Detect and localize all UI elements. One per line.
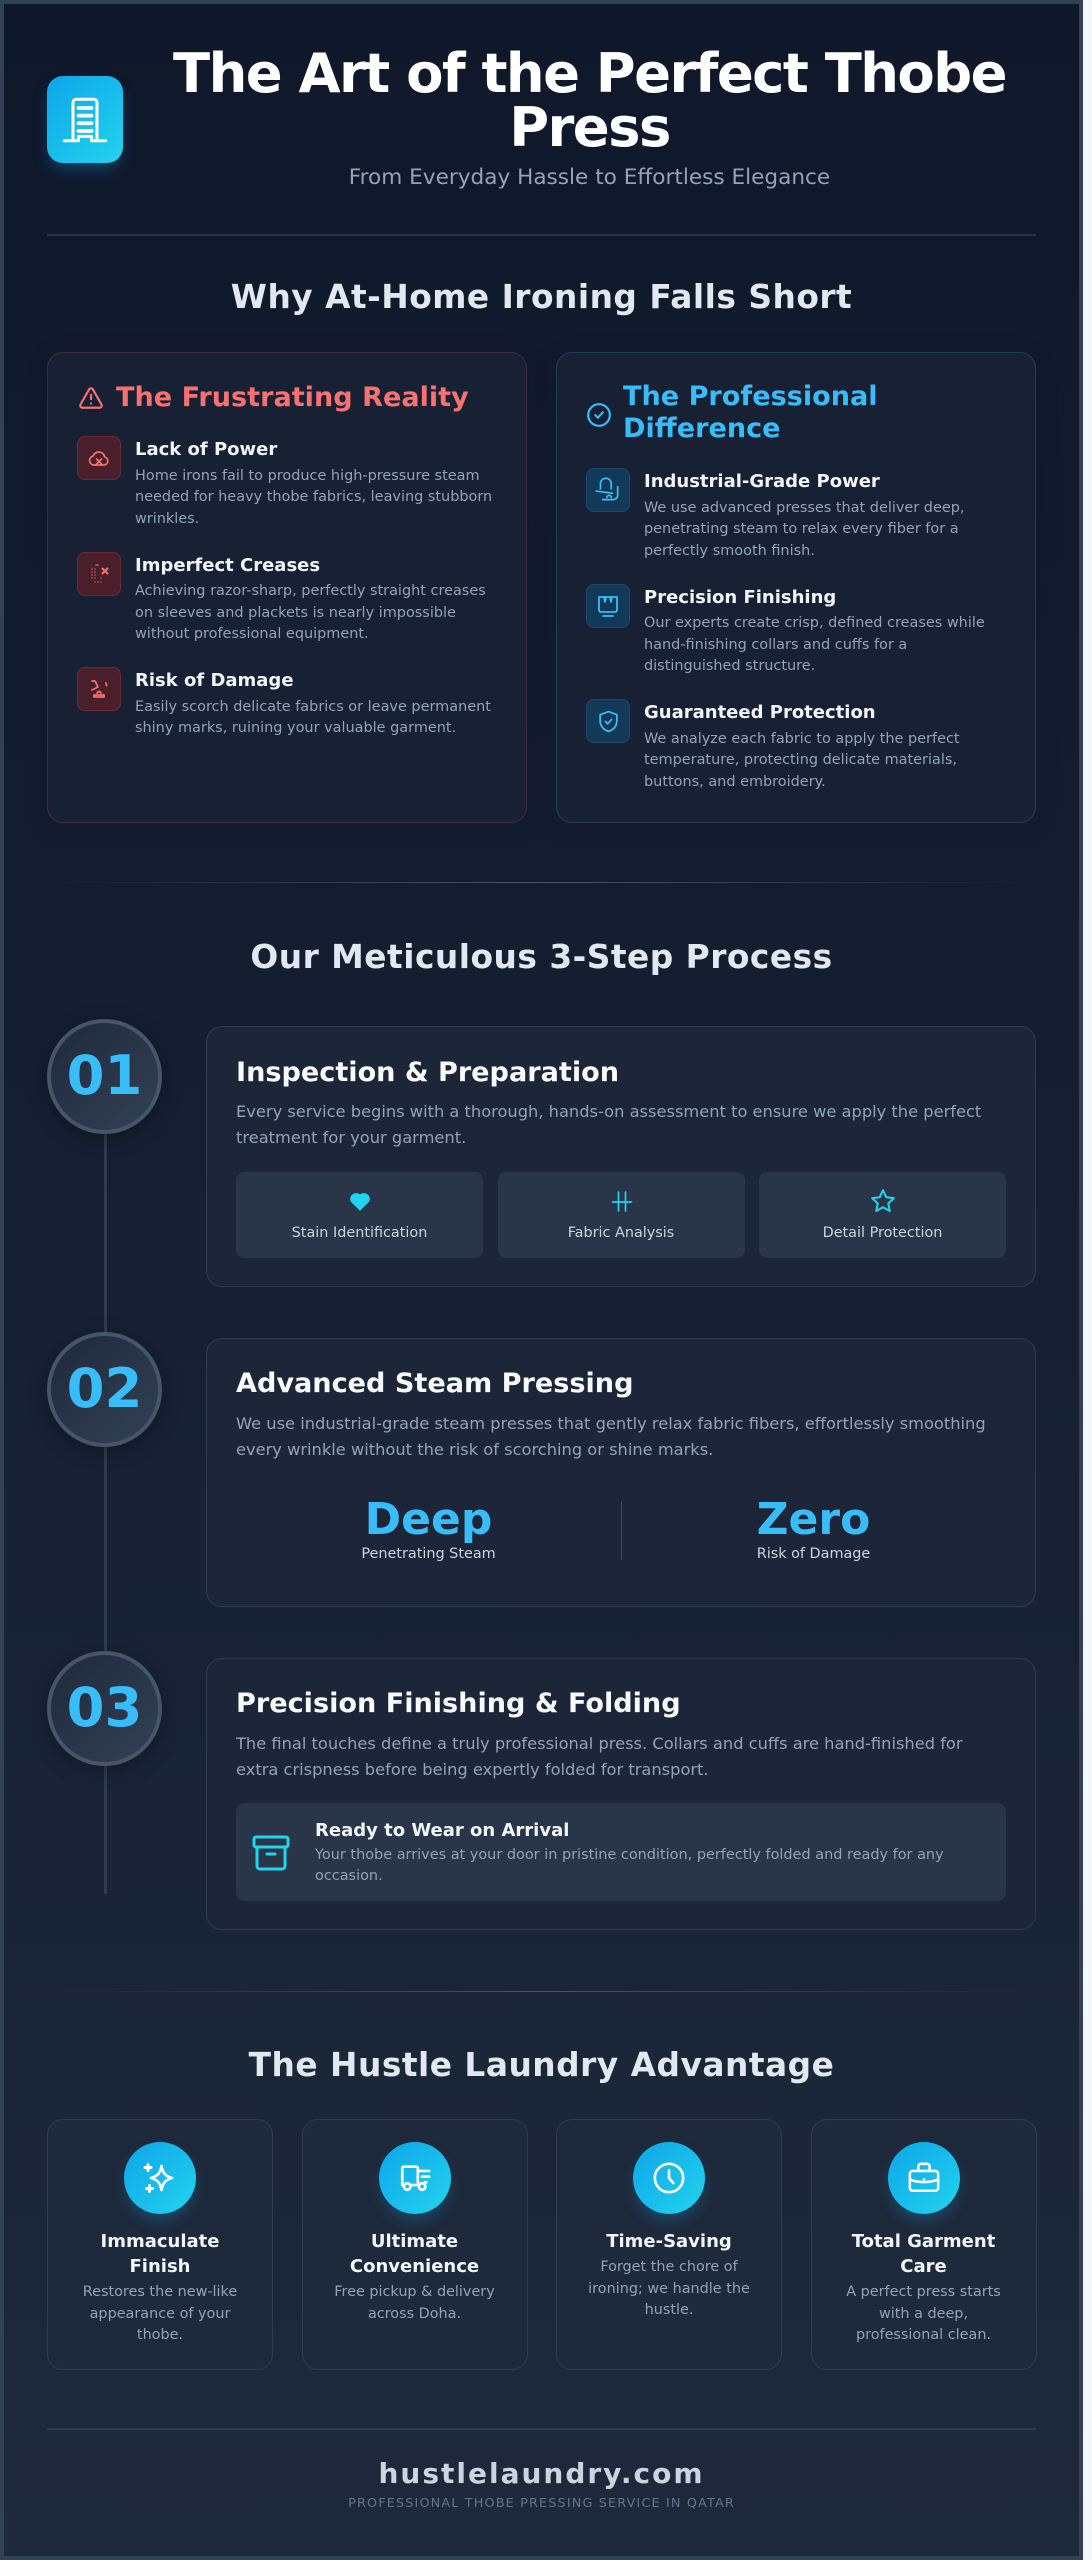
item: guaranteed protection: temperature, protecting delicate materials,: [644, 752, 957, 768]
item: lack of power: Lack of Power: [135, 439, 277, 460]
icon: cloud off: [77, 436, 121, 480]
feature: stain identification: [236, 1172, 483, 1258]
stat: deep: Penetrating Steam: [361, 1546, 496, 1562]
item: guaranteed protection: We analyze each fabric to apply the perfect: [644, 730, 960, 746]
card: ultimate convenience: Ultimate: [371, 2231, 458, 2252]
card: total garment care: Total Garment: [852, 2231, 995, 2252]
heading: why at-home ironing falls short: Why At-Home Ironing Falls Short: [231, 278, 852, 316]
icon: warning triangle: [79, 387, 103, 409]
item: risk of damage: Easily scorch delicate fabrics or leave permanent: [135, 698, 491, 714]
item: precision finishing: Our experts create crisp, defined creases while: [644, 615, 985, 631]
item: lack of power: [77, 436, 492, 527]
icon: star: [871, 1189, 895, 1212]
panel: the professional difference: [556, 352, 1036, 823]
step 02 text: every wrinkle without the risk of scorching or shine marks.: [236, 1440, 713, 1459]
panel heading: the professional difference: The Professional: [623, 381, 878, 412]
card: total garment care: Care: [900, 2256, 947, 2277]
step 03 text: The final touches define a truly professional press. Collars and cuffs are hand-finished for: [236, 1734, 963, 1753]
step 01 number: 01: [67, 1044, 142, 1107]
icon: dotted crease with x: [77, 552, 121, 596]
icon: shield check: [586, 699, 630, 743]
heading: the hustle laundry advantage: The Hustle Laundry Advantage: [249, 2046, 834, 2084]
panel heading: the professional difference: Difference: [623, 413, 781, 444]
step 03 card: [206, 1658, 1036, 1930]
card: immaculate finish: appearance of your: [90, 2306, 230, 2322]
step 01 text: [236, 1102, 981, 1147]
callout: ready to wear on arrival: Your thobe arrives at your door in pristine condition, perfectly folded and ready for any: [315, 1846, 944, 1862]
step 02 number: 02: [67, 1357, 142, 1420]
title: Press: [509, 96, 670, 159]
icon: collar tray: [586, 584, 630, 628]
stat: zero: Risk of Damage: [757, 1546, 870, 1562]
item: precision finishing: hand-finishing collars and cuffs for a: [644, 637, 907, 653]
item: imperfect creases: Achieving razor-sharp, perfectly straight creases: [135, 583, 486, 599]
card: immaculate finish: Immaculate: [101, 2231, 219, 2252]
callout: ready to wear on arrival: occasion.: [315, 1868, 383, 1884]
feature: detail protection: [759, 1172, 1006, 1258]
step 02 card: [206, 1338, 1036, 1607]
item: imperfect creases: without professional equipment.: [135, 626, 369, 642]
panel heading: the frustrating reality: The Frustrating Reality: [116, 382, 469, 413]
card: immaculate finish: [47, 2119, 273, 2370]
footer url: hustlelaundry.com: [378, 2457, 705, 2490]
step 02 number: [47, 1332, 162, 1447]
item: lack of power: wrinkles.: [135, 511, 199, 527]
timeline line: [104, 1130, 107, 1894]
callout: ready to wear on arrival: Ready to Wear on Arrival: [315, 1820, 569, 1841]
item: imperfect creases: Imperfect Creases: [135, 554, 320, 576]
icon: briefcase: [888, 2142, 960, 2214]
icon: archive box: [252, 1836, 290, 1870]
step 01 title: Inspection & Preparation: [236, 1056, 619, 1088]
card: total garment care: [810, 2119, 1036, 2370]
card: total garment care: A perfect press starts: [846, 2284, 1001, 2300]
feature: detail protection: Detail Protection: [823, 1225, 942, 1241]
card: time-saving: hustle.: [645, 2302, 693, 2318]
panel: the frustrating reality: [47, 352, 527, 823]
card: immaculate finish: Finish: [130, 2256, 190, 2277]
card: time-saving: [556, 2119, 782, 2370]
step 02 text: [236, 1414, 986, 1459]
icon: sparkles: [124, 2142, 196, 2214]
item: risk of damage: Risk of Damage: [135, 670, 294, 691]
icon: hash lines: [612, 1191, 632, 1212]
item: industrial-grade power: We use advanced presses that deliver deep,: [644, 500, 964, 516]
feature: fabric analysis: Fabric Analysis: [568, 1225, 674, 1241]
icon: clock: [633, 2142, 705, 2214]
step 03 text: extra crispness before being expertly folded for transport.: [236, 1760, 709, 1779]
item: risk of damage: [77, 667, 491, 736]
step 03 number: [47, 1651, 162, 1766]
step 02 text: We use industrial-grade steam presses that gently relax fabric fibers, effortlessly smoothing: [236, 1414, 986, 1433]
step 01 text: Every service begins with a thorough, hands-on assessment to ensure we apply the perfect: [236, 1102, 981, 1121]
step 01 number: [47, 1019, 162, 1134]
card: immaculate finish: thobe.: [137, 2327, 183, 2343]
step 03 title: Precision Finishing & Folding: [236, 1688, 681, 1718]
item: lack of power: Home irons fail to produce high-pressure steam: [135, 468, 480, 484]
item: precision finishing: [586, 584, 985, 674]
card: immaculate finish: Restores the new-like: [83, 2284, 237, 2300]
callout: ready to wear on arrival: [236, 1803, 1006, 1901]
feature: stain identification: Stain Identification: [292, 1225, 427, 1241]
step 02 title: Advanced Steam Pressing: [236, 1368, 633, 1399]
item: guaranteed protection: Guaranteed Protection: [644, 702, 876, 723]
card: time-saving: ironing; we handle the: [588, 2281, 750, 2297]
step 01 text: treatment for your garment.: [236, 1128, 466, 1147]
card: ultimate convenience: [302, 2119, 528, 2370]
title: The Art of the Perfect Thobe: [173, 42, 1006, 105]
item: industrial-grade power: penetrating steam to relax every fiber for a: [644, 521, 959, 537]
step 03 text: [236, 1734, 963, 1779]
icon: steam press: [586, 468, 630, 512]
header icon: [47, 76, 123, 163]
item: imperfect creases: on sleeves and plackets is nearly impossible: [135, 605, 456, 621]
item: precision finishing: distinguished structure.: [644, 658, 815, 674]
item: industrial-grade power: perfectly smooth finish.: [644, 543, 815, 559]
title: [173, 42, 1006, 159]
card: ultimate convenience: Free pickup & delivery: [334, 2284, 495, 2300]
icon: delivery truck: [378, 2142, 450, 2214]
icon: check circle: [587, 403, 611, 427]
item: imperfect creases: [77, 552, 486, 642]
card: ultimate convenience: across Doha.: [368, 2306, 461, 2322]
step 01 card: [206, 1026, 1036, 1287]
card: time-saving: Forget the chore of: [600, 2259, 738, 2275]
heading: our meticulous 3-step process: Our Meticulous 3-Step Process: [250, 938, 833, 976]
stat: zero: Zero: [757, 1494, 870, 1545]
feature: fabric analysis: [498, 1172, 744, 1258]
item: industrial-grade power: [586, 468, 964, 559]
footer tagline: PROFESSIONAL THOBE PRESSING SERVICE IN QATAR: [348, 2496, 735, 2511]
card: time-saving: Time-Saving: [606, 2231, 732, 2252]
card: total garment care: with a deep,: [879, 2306, 968, 2322]
item: guaranteed protection: buttons, and embroidery.: [644, 774, 826, 790]
item: industrial-grade power: Industrial-Grade Power: [644, 471, 880, 492]
step 03 number: 03: [67, 1676, 142, 1739]
card: total garment care: professional clean.: [856, 2327, 991, 2343]
item: risk of damage: shiny marks, ruining your valuable garment.: [135, 720, 456, 736]
subtitle: From Everyday Hassle to Effortless Elegance: [349, 165, 830, 190]
item: lack of power: needed for heavy thobe fabrics, leaving stubborn: [135, 489, 492, 505]
icon: scorched iron: [77, 667, 121, 711]
item: precision finishing: Precision Finishing: [644, 586, 836, 608]
panel heading: the professional difference: [623, 381, 878, 444]
icon: heart: [350, 1193, 370, 1210]
item: guaranteed protection: [586, 699, 960, 790]
stat: deep: Deep: [365, 1494, 492, 1545]
card: ultimate convenience: Convenience: [350, 2256, 479, 2277]
